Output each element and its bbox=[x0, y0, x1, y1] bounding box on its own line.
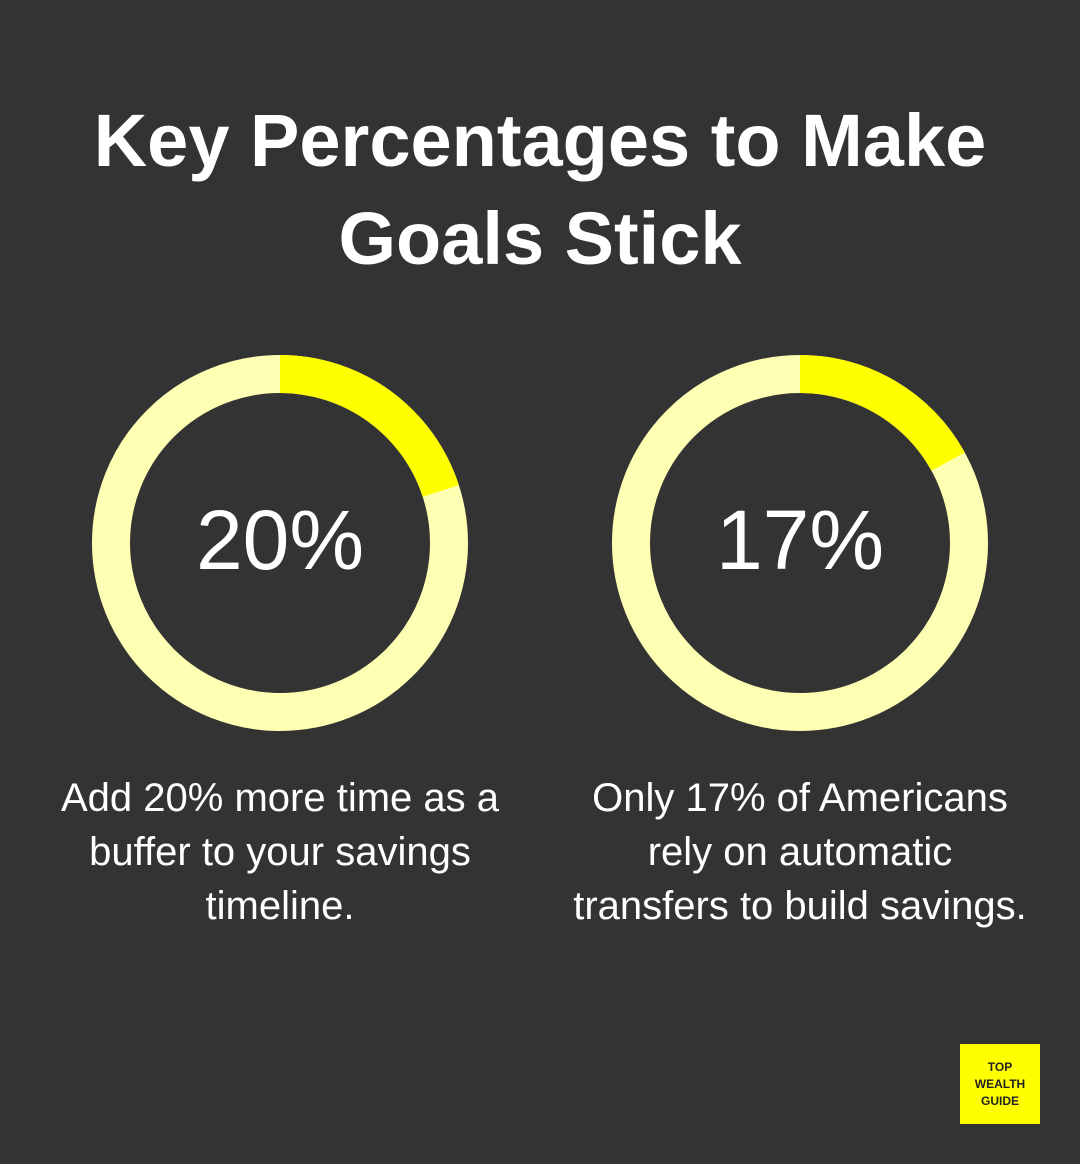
text: right description: Only 17% of Americans bbox=[592, 776, 1008, 820]
title: Goals Stick bbox=[338, 197, 742, 280]
title bbox=[94, 99, 986, 280]
logo: GUIDE bbox=[981, 1094, 1019, 1108]
text: right description bbox=[573, 776, 1027, 928]
text: left description bbox=[61, 776, 499, 928]
donut chart: 17%: 17% bbox=[716, 493, 884, 587]
title: Key Percentages to Make bbox=[94, 99, 986, 182]
text: left description: buffer to your savings bbox=[89, 830, 471, 874]
logo: WEALTH bbox=[975, 1076, 1025, 1090]
donut chart: 20% bbox=[92, 355, 468, 731]
logo bbox=[960, 1044, 1040, 1124]
text: right description: rely on automatic bbox=[648, 830, 952, 874]
logo: TOP bbox=[988, 1060, 1012, 1074]
text: right description: transfers to build savings. bbox=[573, 884, 1027, 928]
donut chart: 20%: 20% bbox=[196, 493, 364, 587]
text: left description: Add 20% more time as a bbox=[61, 776, 499, 820]
donut chart: 17% bbox=[612, 355, 988, 731]
text: left description: timeline. bbox=[206, 884, 354, 928]
